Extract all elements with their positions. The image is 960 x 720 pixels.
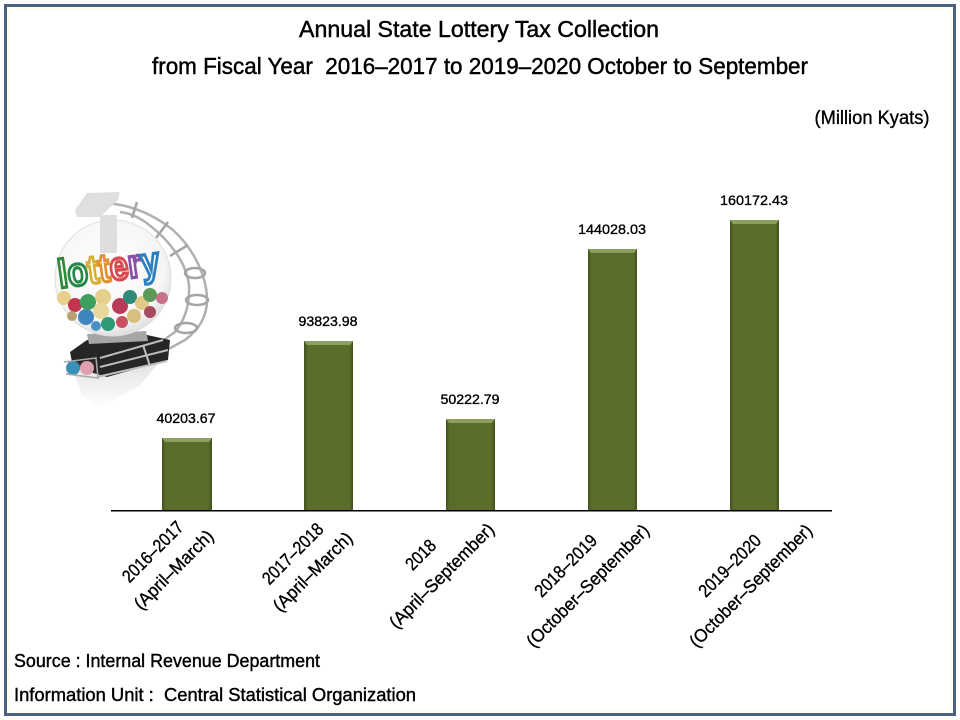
value labels [156, 192, 788, 426]
lottery word: lottery [55, 239, 163, 297]
base rails [97, 340, 168, 377]
inner tube [100, 215, 117, 253]
bar: 2016-2017 [162, 438, 212, 510]
title [152, 16, 808, 79]
source note: Source : Internal Revenue Department [14, 651, 320, 671]
information unit note: Information Unit : Central Statistical Organization [14, 685, 416, 705]
value labels: 93823.98 [298, 313, 358, 329]
category labels: (October–September) [685, 520, 816, 651]
ball outlet [64, 358, 98, 378]
category labels: (April–September) [385, 519, 498, 632]
title: Annual State Lottery Tax Collection [299, 16, 659, 42]
base [70, 335, 170, 377]
value labels: 40203.67 [156, 410, 216, 426]
machine shadow [72, 352, 168, 408]
category labels: 2018 [401, 535, 440, 574]
icon: lottery machine [55, 192, 208, 408]
category labels: 2016–2017 [118, 517, 187, 586]
value labels: 144028.03 [578, 221, 646, 237]
category labels: (April–March) [269, 528, 357, 616]
value labels: 50222.79 [440, 391, 500, 407]
bar: 2018 [446, 419, 495, 510]
category labels: (April–March) [130, 526, 218, 614]
category labels: 2019–2020 [694, 530, 765, 601]
bars [162, 220, 779, 510]
category labels: (October–September) [522, 520, 653, 651]
baseline [111, 510, 832, 512]
category labels: 2018–2019 [530, 530, 601, 601]
value labels: 160172.43 [720, 192, 788, 208]
globe [55, 220, 171, 336]
top chute [75, 192, 120, 217]
category labels [118, 517, 816, 651]
track rails [100, 202, 208, 352]
title: from Fiscal Year 2016–2017 to 2019–2020 October to September [152, 53, 808, 79]
bar: 2017-2018 [304, 341, 353, 510]
collar [87, 331, 148, 344]
bar: 2018-2019 [588, 249, 637, 510]
bar chart [111, 192, 832, 651]
category labels: 2017–2018 [258, 519, 327, 588]
balls [57, 288, 168, 331]
bar: 2019-2020 [730, 220, 779, 510]
unit label: (Million Kyats) [814, 108, 930, 129]
